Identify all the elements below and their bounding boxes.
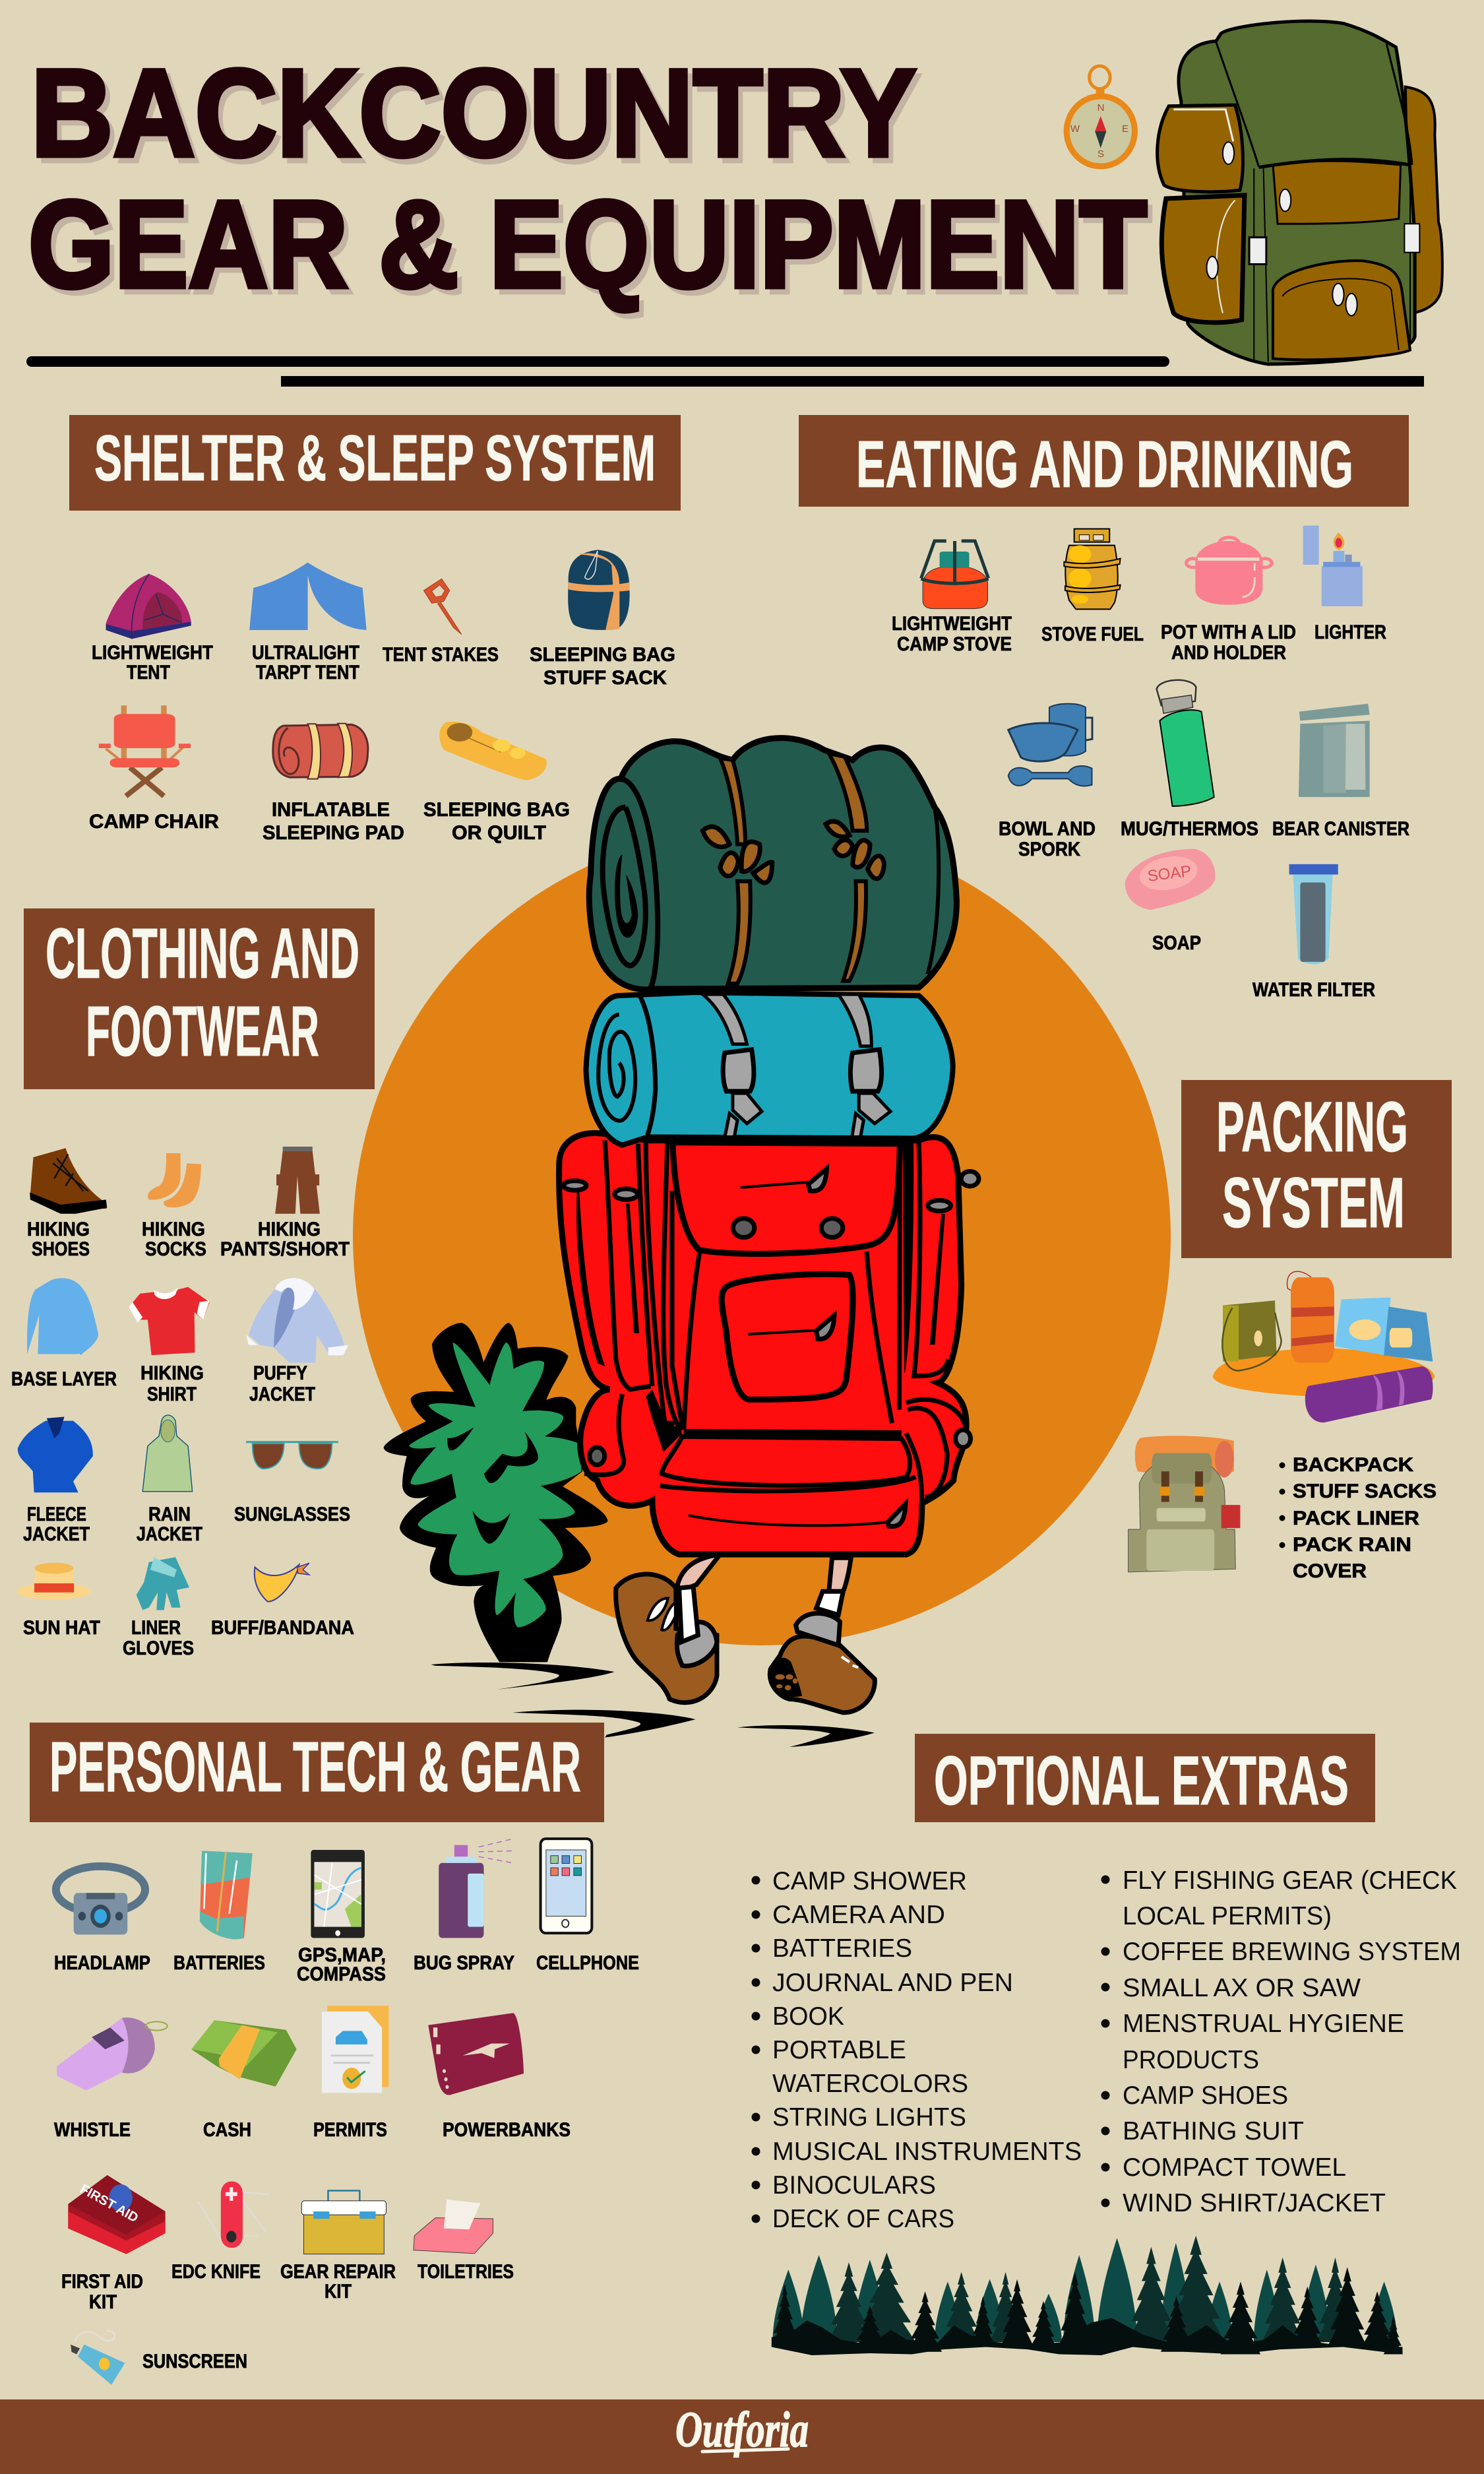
list: optional extras left column: CAMP SHOWER — [772, 1867, 967, 1895]
logo: Outforia: Outforia — [675, 2402, 809, 2458]
list: optional extras left column: BATTERIES — [772, 1934, 912, 1963]
labels: clothing items: JACKET — [249, 1383, 315, 1405]
panel: clothing and footwear — [11, 908, 375, 1659]
labels: shelter items: CAMP CHAIR — [89, 811, 219, 833]
list: optional extras right column: LOCAL PERMITS) — [1123, 1902, 1332, 1930]
panel: packing system — [1181, 1080, 1452, 1582]
labels: eating items: STOVE FUEL — [1041, 623, 1144, 645]
list: packing items — [1280, 1454, 1437, 1582]
list: optional extras right column: BATHING SUIT — [1123, 2117, 1304, 2145]
panel: hiker with red backpack — [512, 738, 979, 1747]
labels: shelter items: TENT — [127, 662, 170, 683]
list: optional extras right column: PRODUCTS — [1123, 2046, 1259, 2074]
list: packing items: STUFF SACKS — [1293, 1480, 1437, 1502]
title: BACKCOUNTRY — [36, 49, 921, 187]
list: optional extras left column: PORTABLE — [772, 2036, 906, 2064]
list: optional extras left column: BINOCULARS — [772, 2171, 936, 2200]
panel: optional extras — [752, 1734, 1461, 2233]
list: packing items: PACK LINER — [1293, 1507, 1419, 1529]
list: optional extras left column — [752, 1867, 1082, 2233]
heading: shelter and sleep system — [69, 415, 681, 511]
labels: shelter items: ULTRALIGHT — [252, 642, 359, 664]
heading: eating and drinking — [799, 415, 1409, 507]
labels: clothing items: PUFFY — [253, 1362, 307, 1384]
labels: clothing items: FLEECE — [27, 1504, 86, 1525]
list: optional extras left column: MUSICAL INSTRUMENTS — [772, 2138, 1082, 2166]
labels: clothing items — [11, 1219, 354, 1659]
teal sleeping pad roll — [586, 992, 953, 1145]
labels: tech items: KIT — [325, 2281, 352, 2302]
labels: tech items: HEADLAMP — [54, 1952, 150, 1974]
ground streaks — [512, 1710, 875, 1747]
labels: eating items: AND HOLDER — [1171, 642, 1286, 664]
title — [28, 44, 1152, 319]
divider lines — [26, 356, 1424, 387]
labels: clothing items: LINER — [131, 1617, 181, 1639]
list: optional extras left column: JOURNAL AND PEN — [772, 1969, 1013, 1997]
labels: tech items: BUG SPRAY — [414, 1952, 514, 1974]
labels: eating items: SOAP — [1152, 932, 1201, 954]
heading: clothing and footwear: FOOTWEAR — [86, 991, 319, 1071]
red backpack — [559, 1133, 979, 1554]
labels: eating items: BOWL AND — [999, 818, 1096, 840]
icons: stove, fuel, pot, lighter — [921, 526, 1363, 609]
list: optional extras right column: COMPACT TOWEL — [1123, 2153, 1346, 2182]
labels: tech items: BATTERIES — [173, 1952, 265, 1974]
labels: tech items: GEAR REPAIR — [280, 2261, 396, 2283]
illustration: forest treeline — [772, 2236, 1403, 2355]
list: optional extras right column: WIND SHIRT/JACKET — [1123, 2189, 1386, 2217]
icons: shelter items — [99, 550, 630, 796]
labels: clothing items: GLOVES — [123, 1637, 194, 1659]
labels: clothing items: PANTS/SHORT — [220, 1238, 350, 1260]
panel: tree behind hiker — [384, 1323, 615, 1690]
title: GEAR & EQUIPMENT — [33, 180, 1152, 319]
list: packing items: BACKPACK — [1293, 1454, 1413, 1476]
list: optional extras left column: BOOK — [772, 2002, 844, 2031]
labels: shelter items: TENT STAKES — [383, 644, 499, 666]
list: optional extras left column: DECK OF CARS — [772, 2205, 954, 2233]
icons: tech items — [56, 1839, 592, 2385]
list: packing items: PACK RAIN — [1293, 1534, 1411, 1556]
icon: compass: S — [1098, 148, 1104, 160]
icon: compass: W — [1070, 123, 1080, 135]
footer band — [0, 2399, 1484, 2474]
labels: tech items: SUNSCREEN — [142, 2351, 247, 2372]
title: GEAR & EQUIPMENT — [28, 175, 1147, 313]
labels: shelter items: SLEEPING BAG — [423, 799, 570, 821]
labels: tech items: TOILETRIES — [417, 2261, 514, 2283]
list: packing items: COVER — [1293, 1560, 1367, 1582]
labels: clothing items: JACKET — [137, 1523, 202, 1545]
labels: shelter items: SLEEPING BAG — [530, 644, 675, 666]
labels: tech items: GPS,MAP, — [298, 1944, 386, 1966]
list: optional extras right column — [1101, 1866, 1461, 2217]
list: optional extras left column: STRING LIGHTS — [772, 2103, 966, 2132]
panel: personal tech and gear — [30, 1723, 639, 2385]
icons: clothing items — [16, 1147, 348, 1610]
labels: eating items: POT WITH A LID — [1161, 621, 1296, 643]
list: optional extras left column: CAMERA AND — [772, 1901, 945, 1929]
list: optional extras right column: FLY FISHING GEAR (CHECK — [1123, 1866, 1457, 1895]
labels: shelter items: SLEEPING PAD — [263, 822, 404, 844]
labels: shelter items: OR QUILT — [452, 822, 546, 844]
list: optional extras right column: CAMP SHOES — [1123, 2081, 1288, 2110]
labels: eating items: MUG/THERMOS — [1121, 818, 1258, 840]
labels: clothing items: BASE LAYER — [11, 1368, 117, 1390]
labels: tech items: EDC KNIFE — [171, 2261, 261, 2283]
labels: tech items: WHISTLE — [54, 2119, 131, 2141]
labels: eating items: BEAR CANISTER — [1272, 818, 1409, 840]
heading: clothing and footwear — [24, 908, 375, 1089]
heading: shelter and sleep system: SHELTER & SLEEP SYSTEM — [94, 422, 656, 494]
icon: compass: E — [1122, 123, 1128, 135]
labels: tech items — [54, 1944, 639, 2372]
list: optional extras right column: COFFEE BREWING SYSTEM — [1123, 1938, 1461, 1966]
labels: eating items: LIGHTER — [1314, 621, 1386, 643]
labels: tech items: PERMITS — [313, 2119, 387, 2141]
labels: eating items: CAMP STOVE — [897, 633, 1012, 655]
labels: clothing items: SOCKS — [145, 1238, 206, 1260]
list: optional extras right column: SMALL AX OR SAW — [1123, 1974, 1361, 2002]
title: BACKCOUNTRY — [31, 44, 916, 182]
labels: clothing items: BUFF/BANDANA — [211, 1617, 354, 1639]
labels: shelter items — [89, 642, 675, 844]
icon: compass: N — [1098, 102, 1104, 113]
labels: tech items: FIRST AID — [61, 2271, 143, 2293]
heading: personal tech and gear: PERSONAL TECH & GEAR — [49, 1727, 581, 1806]
labels: tech items: COMPASS — [297, 1963, 386, 1985]
icon: compass — [1067, 66, 1134, 166]
labels: clothing items: RAIN — [148, 1504, 191, 1525]
green sleeping bag roll — [589, 738, 956, 990]
labels: clothing items: SUN HAT — [23, 1617, 100, 1639]
panel: eating and drinking — [799, 415, 1435, 1572]
labels: tech items: KIT — [89, 2291, 117, 2313]
labels: shelter items: TARPT TENT — [256, 662, 359, 683]
labels: shelter items: INFLATABLE — [272, 799, 390, 821]
panel: shelter and sleep system — [69, 415, 681, 844]
heading: packing system — [1181, 1080, 1452, 1258]
labels: clothing items: JACKET — [23, 1523, 90, 1545]
list: optional extras left column: WATERCOLORS — [772, 2070, 968, 2098]
labels: eating items: LIGHTWEIGHT — [892, 613, 1012, 635]
heading: optional extras — [915, 1734, 1375, 1822]
labels: clothing items: SHIRT — [147, 1383, 197, 1405]
labels: clothing items: SUNGLASSES — [234, 1504, 350, 1525]
labels: eating items: SPORK — [1018, 839, 1080, 860]
legs and boots — [616, 1554, 875, 1713]
labels: tech items: CASH — [203, 2119, 251, 2141]
labels: shelter items: STUFF SACK — [543, 667, 667, 689]
labels: clothing items: HIKING — [140, 1362, 204, 1384]
orange sun circle — [353, 827, 1171, 1645]
labels: shelter items: LIGHTWEIGHT — [92, 642, 213, 664]
labels: tech items: CELLPHONE — [536, 1952, 639, 1974]
icons: bowl, bottle, canister, soap, filter — [1008, 680, 1435, 1572]
labels: tech items: POWERBANKS — [443, 2119, 571, 2141]
labels: eating items: WATER FILTER — [1252, 979, 1375, 1001]
labels: clothing items: SHOES — [32, 1238, 90, 1260]
panel: personal tech and gear: FIRST AID — [78, 2182, 140, 2225]
panel: eating and drinking: SOAP — [1146, 862, 1192, 885]
list: optional extras right column: MENSTRUAL HYGIENE — [1123, 2010, 1404, 2038]
labels: clothing items: HIKING — [27, 1219, 90, 1240]
icon: green backpack — [1158, 21, 1442, 364]
heading: personal tech and gear — [30, 1723, 604, 1822]
labels: clothing items: HIKING — [142, 1219, 205, 1240]
labels: eating items — [892, 613, 1409, 1001]
heading: clothing and footwear: CLOTHING AND — [46, 913, 359, 993]
labels: clothing items: HIKING — [258, 1219, 321, 1240]
